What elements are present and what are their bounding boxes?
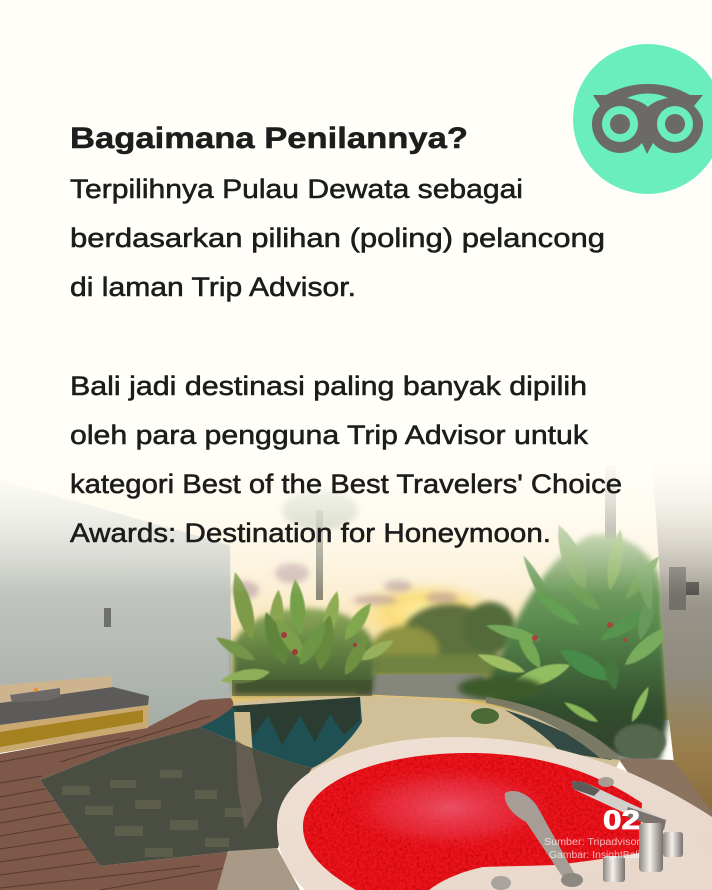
- wet stone floor: [40, 727, 312, 866]
- fade to page colour at top of photo: [0, 460, 712, 595]
- long spout: [572, 781, 666, 830]
- right wall lamp: [669, 567, 699, 610]
- owl brow gap: [627, 94, 668, 107]
- clouds: [231, 563, 458, 605]
- low pool wall: [356, 674, 490, 700]
- bench: [0, 676, 149, 753]
- floor reflection: [236, 740, 262, 830]
- text block: intro: berdasarkan pilihan (poling) pelancong: [70, 223, 605, 253]
- right deck boards: [618, 758, 712, 840]
- text block: award explanation: [70, 371, 622, 548]
- tree reflections in water: [232, 697, 612, 772]
- deck boards: [0, 716, 225, 890]
- logo mint circle: [573, 44, 712, 194]
- wall lamp left: [104, 608, 111, 627]
- owl eye right: [657, 106, 693, 142]
- bench wooden back: [0, 676, 112, 705]
- right stone wall: [652, 460, 712, 812]
- teal reflection water: [200, 697, 362, 768]
- text block: award explanation: Awards: Destination for Honeymoon.: [70, 518, 551, 548]
- heading: Bagaimana Penilannya?: [70, 122, 468, 155]
- mixer column: [639, 823, 663, 872]
- text block: award explanation: Bali jadi destinasi paling banyak dipilih: [70, 371, 587, 401]
- sky: [0, 470, 712, 720]
- red flower petals: [303, 753, 642, 890]
- owl icon: [592, 84, 703, 154]
- left wall: [0, 480, 232, 735]
- rolled towels: [10, 688, 60, 702]
- source credits: [544, 837, 641, 861]
- bathtub with red petals: [277, 737, 712, 890]
- left plant cluster: [213, 570, 397, 696]
- owl eye left: [602, 106, 638, 142]
- bench cushion: [0, 687, 149, 725]
- source credits: Sumber: Tripadvisor: [544, 837, 641, 848]
- pool water: [232, 696, 620, 800]
- deck: [0, 698, 240, 890]
- text block: intro: [70, 174, 605, 302]
- text block: award explanation: oleh para pengguna Trip Advisor untuk: [70, 420, 589, 450]
- jet fittings: [491, 876, 511, 890]
- pool curved edge: [486, 697, 622, 760]
- page number: 02: [603, 805, 640, 835]
- hand shower: [505, 791, 577, 882]
- palm trunk and pole: [282, 465, 616, 600]
- right plant cluster: [458, 522, 677, 760]
- tub rim: [277, 737, 712, 890]
- faucets and tub fittings: [491, 777, 683, 890]
- text block: award explanation: kategori Best of the Best Travelers' Choice: [70, 469, 622, 499]
- tub shoulder: [640, 808, 712, 890]
- text block: intro: Terpilihnya Pulau Dewata sebagai: [70, 174, 523, 204]
- bench golden base: [0, 705, 149, 753]
- tripadvisor logo: [573, 44, 712, 194]
- sun glow: [350, 580, 500, 644]
- stone tile pattern: [62, 770, 247, 857]
- source credits: Gambar: InsightBali: [549, 850, 640, 861]
- distant trees: [371, 602, 516, 677]
- text block: intro: di laman Trip Advisor.: [70, 272, 356, 302]
- stone step: [217, 848, 300, 890]
- knobs: [663, 832, 683, 857]
